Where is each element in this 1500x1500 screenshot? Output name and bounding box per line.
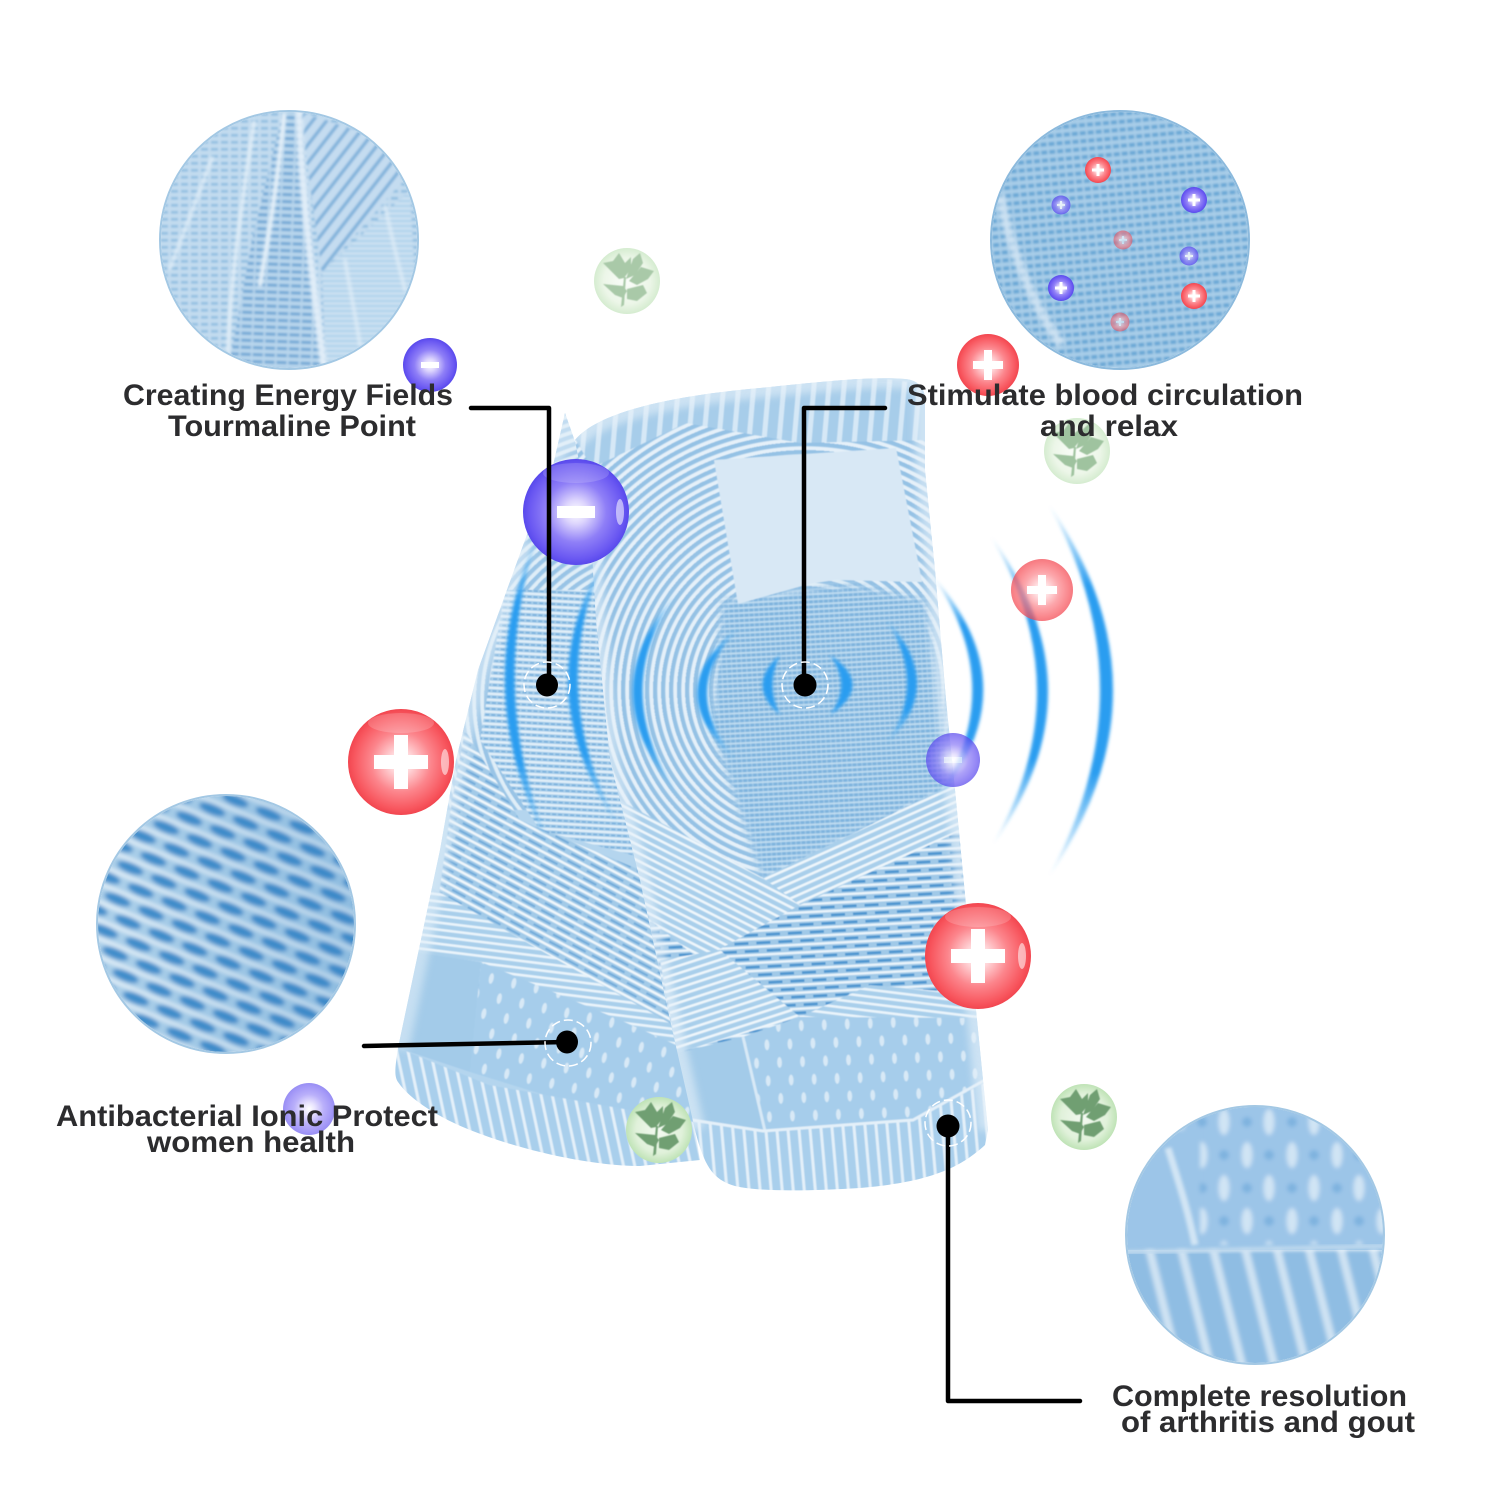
sleeve: back (left) knee [395, 413, 700, 1166]
wave: right outer [1048, 503, 1113, 878]
upper curved knit [448, 414, 594, 810]
callout: arthritis leader [925, 1100, 1080, 1401]
ion: large blue minus [523, 459, 629, 565]
ion: red 2 [1181, 283, 1207, 309]
ion: faded blue bottom left [283, 1083, 335, 1135]
panel: fabric detail left [90, 790, 360, 1060]
panel: fabric detail top left [155, 105, 425, 375]
leaf: upper right [1044, 418, 1110, 484]
callout: blood circulation leader [782, 408, 885, 708]
text: arthritis: Complete resolution [1112, 1380, 1407, 1413]
wave: inner left [697, 625, 742, 762]
patella panel [708, 581, 950, 876]
text: arthritis: of arthritis and gout [1121, 1406, 1415, 1439]
panel: fabric detail bottom right [1120, 1100, 1390, 1375]
ion: small blue minus top [403, 338, 457, 392]
ion: red 1 [1085, 157, 1111, 183]
lower solid panel [685, 1038, 762, 1129]
knee fine knit [480, 590, 634, 856]
wave: inner right [885, 618, 917, 745]
ion: red faded 2 [1110, 312, 1130, 332]
text: blood circulation: and relax [1040, 410, 1178, 443]
ion: blue 3 [1180, 246, 1198, 266]
sleeve: front (right) knee [570, 370, 1000, 1200]
energy waves [505, 503, 1113, 878]
crossing strap [439, 733, 671, 1024]
callout: antibacterial leader [364, 1020, 591, 1066]
bottom rib [396, 1050, 700, 1166]
ion: faded blue minus [926, 733, 980, 787]
ion: blue 1 [1052, 196, 1070, 214]
top rib band [576, 378, 925, 464]
lower dotted panel [743, 1017, 990, 1131]
leaf: top centre [594, 248, 660, 314]
bottom rib [696, 1084, 988, 1190]
wave: left third [632, 590, 682, 800]
upper curved knit [575, 423, 948, 878]
ion: red plus top right [957, 334, 1019, 396]
wave: left outer [505, 530, 552, 852]
ion: red faded 1 [1114, 230, 1132, 250]
lower dotted panel [470, 962, 710, 1125]
crossing strap [610, 783, 985, 1053]
text: blood circulation: Stimulate blood circulation [907, 379, 1303, 412]
panel: fabric detail top right with ions [985, 105, 1255, 375]
leaf: lower centre [626, 1097, 692, 1163]
wave: right second [990, 535, 1048, 846]
wave: centre [762, 655, 852, 715]
lower solid panel [398, 952, 481, 1072]
ion: large red plus left [348, 709, 454, 815]
wave: right third [932, 575, 983, 802]
leaf: lower right [1051, 1084, 1117, 1150]
text: antibacterial: Antibacterial Ionic Protect [56, 1100, 438, 1133]
callout: energy fields leader [471, 408, 570, 708]
ion: blue 2 [1181, 187, 1207, 213]
ion: faded red plus [1011, 559, 1073, 621]
wave: left second [568, 555, 622, 832]
text: energy fields: Creating Energy Fields [123, 379, 453, 412]
text: energy fields: Tourmaline Point [168, 410, 416, 443]
ion: blue 4 [1048, 275, 1074, 301]
text: antibacterial: women health [146, 1126, 355, 1159]
ion: large red plus right [925, 903, 1031, 1009]
velcro tab [714, 448, 922, 604]
